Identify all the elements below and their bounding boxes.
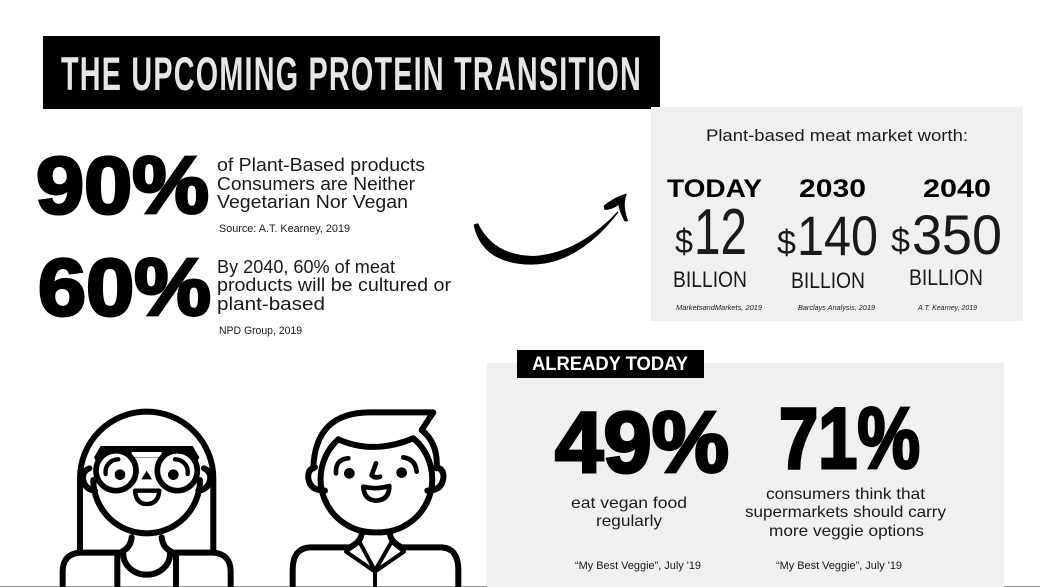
stat: 90 percent: [36, 141, 425, 235]
column: today: TODAY: [667, 175, 762, 203]
stat: 71 percent: more veggie options: [769, 523, 924, 540]
icon: woman with glasses: [63, 412, 231, 586]
panel: already today: [487, 350, 1004, 587]
stat: 49 percent: [555, 395, 729, 572]
stat: 49 percent: eat vegan food: [571, 495, 687, 512]
stat: 60 percent: products will be cultured or: [217, 275, 451, 295]
column: 2040: 350: [912, 203, 1002, 266]
stat: 90 percent: Source: A.T. Kearney, 2019: [219, 223, 350, 235]
column: today: [667, 175, 763, 312]
stat: 49 percent: “My Best Veggie”, July '19: [575, 560, 701, 572]
column: 2040: BILLION: [909, 265, 983, 290]
column: 2040: A.T. Kearney, 2019: [917, 303, 978, 312]
stat: 71 percent: supermarkets should carry: [745, 504, 946, 521]
stat: 60 percent: 60%: [38, 243, 211, 333]
stat: 60 percent: NPD Group, 2019: [219, 325, 302, 337]
stat: 49 percent: 49%: [555, 395, 729, 491]
stat: 90 percent: Vegetarian Nor Vegan: [217, 192, 408, 212]
column: 2030: BILLION: [791, 268, 865, 293]
panel heading: Plant-based meat market worth:: [706, 126, 968, 145]
stat: 71 percent: [745, 391, 946, 572]
title: [43, 36, 660, 109]
column: 2030: 140: [797, 204, 878, 267]
column: 2030: 2030: [799, 175, 866, 203]
stat: 60 percent: [38, 243, 451, 337]
stat: 71 percent: consumers think that: [766, 486, 926, 503]
panel: plant-based meat market: [651, 107, 1023, 321]
column: today: MarketsandMarkets, 2019: [676, 303, 763, 312]
column: today: 12: [694, 195, 747, 268]
stat: 90 percent: 90%: [36, 141, 209, 231]
stat: 90 percent: of Plant-Based products: [217, 155, 425, 175]
column: 2030: [777, 175, 878, 312]
icon: man: [293, 412, 458, 586]
title: THE UPCOMING PROTEIN TRANSITION: [61, 47, 642, 100]
column: 2040: [891, 175, 1002, 312]
stat: 71 percent: “My Best Veggie”, July '19: [776, 560, 902, 572]
column: today: BILLION: [673, 267, 747, 292]
stat: 90 percent: Consumers are Neither: [217, 174, 415, 194]
stat: 60 percent: plant-based: [217, 294, 325, 314]
column: 2040: 2040: [923, 175, 991, 203]
stat: 49 percent: regularly: [596, 513, 662, 530]
arrow: [474, 194, 627, 264]
label: already today: ALREADY TODAY: [532, 354, 688, 375]
stat: 71 percent: 71%: [779, 391, 920, 487]
column: 2040: $: [891, 222, 910, 260]
column: 2030: $: [777, 224, 796, 262]
column: today: $: [675, 223, 693, 261]
label: already today: [517, 350, 704, 378]
column: 2030: Barclays Analysis, 2019: [798, 303, 876, 312]
stat: 60 percent: By 2040, 60% of meat: [217, 257, 395, 277]
